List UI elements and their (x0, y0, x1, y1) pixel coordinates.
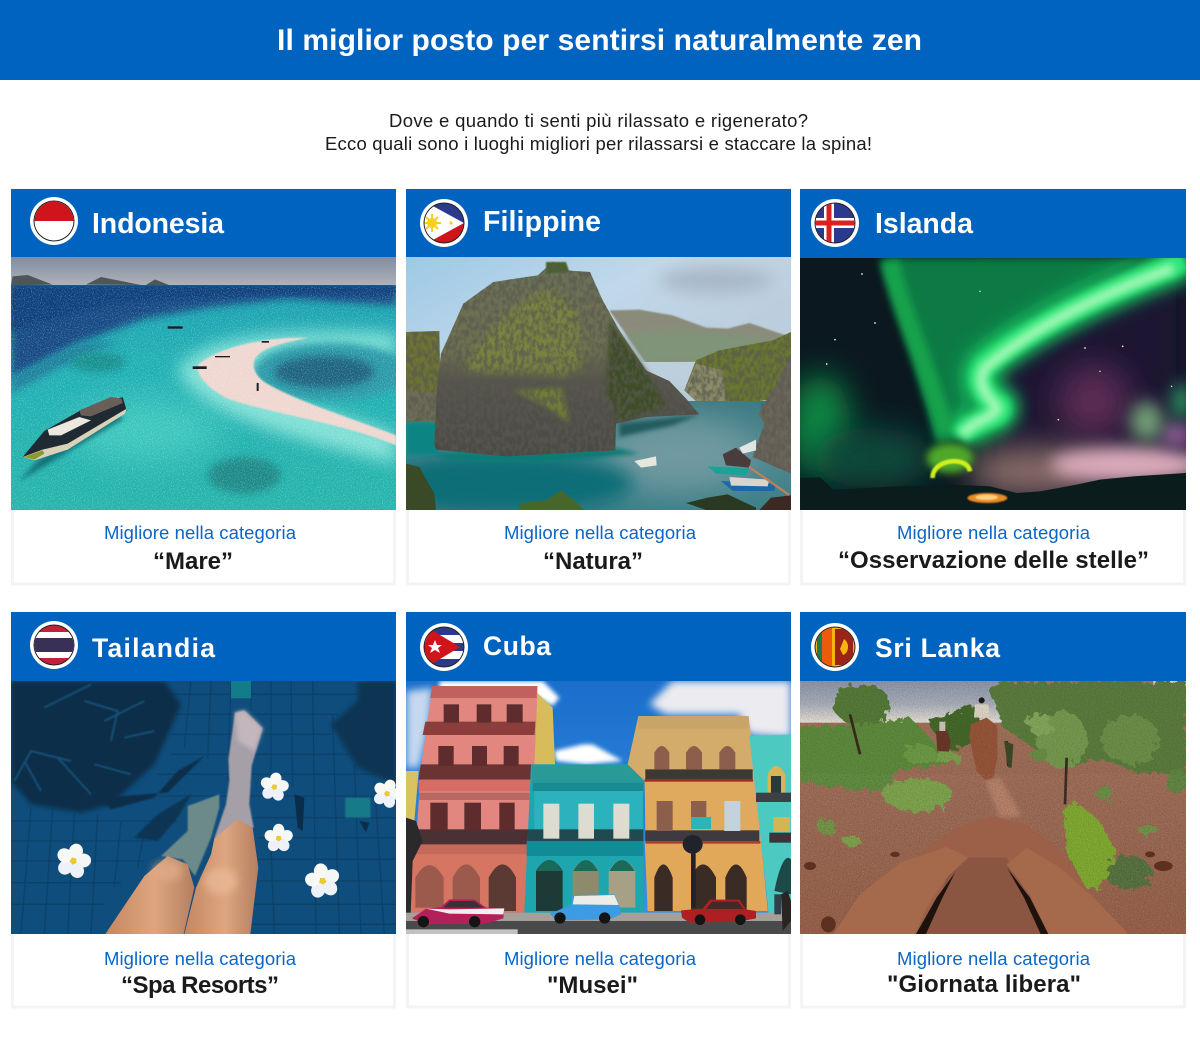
header bar: Filippine (406, 189, 791, 257)
caption: Tailandia: “Spa Resorts” (121, 972, 279, 999)
panel: Indonesia (11, 189, 408, 584)
yellow side (534, 691, 555, 764)
left rock (406, 331, 441, 422)
icon: Philippines flag (420, 199, 468, 247)
caption: Tailandia: Migliore nella categoria (104, 948, 297, 969)
heading: Indonesia: Indonesia (92, 208, 225, 240)
caption: Sri Lanka: "Giornata libera" (887, 971, 1081, 998)
caption: Cuba: "Musei" (547, 972, 638, 999)
heading: Sri Lanka: Sri Lanka (875, 633, 1000, 663)
header bar: Cuba (406, 612, 791, 681)
teal building (524, 764, 643, 913)
icon: Cuba flag (420, 623, 468, 671)
header bar: Islanda (800, 189, 1186, 258)
intro text (325, 110, 872, 154)
panel: Cuba (406, 612, 791, 1007)
caption: Filippine: Migliore nella categoria (504, 522, 697, 543)
caption: Cuba: Migliore nella categoria (504, 948, 697, 969)
caption: Indonesia: “Mare” (153, 548, 233, 575)
right rock (684, 332, 791, 401)
caption: Indonesia: Migliore nella categoria (104, 522, 297, 543)
panel: Islanda (790, 189, 1200, 584)
left foot submerged (161, 794, 219, 876)
pink building (409, 686, 538, 913)
orange building (628, 716, 768, 911)
caption: Cuba (504, 948, 697, 999)
elephant riders ahead (936, 697, 1013, 780)
header bar: Sri Lanka (800, 612, 1186, 681)
title: Il miglior posto per sentirsi naturalmente zen (277, 24, 922, 57)
header bar: Tailandia (11, 612, 396, 681)
right teal building (749, 734, 791, 914)
icon: Indonesia flag (30, 197, 78, 245)
street (406, 913, 791, 923)
right leg submerged (214, 710, 263, 838)
caption: Sri Lanka: Migliore nella categoria (897, 948, 1091, 969)
photo: northern lights (800, 258, 1186, 510)
elephant back foreground (833, 816, 1128, 934)
caption: Islanda (838, 522, 1149, 574)
heading: Tailandia: Tailandia (92, 633, 215, 663)
caption: Filippine: “Natura” (543, 548, 643, 575)
photo: colourful Havana buildings (406, 681, 791, 934)
caption: Filippine (504, 522, 697, 575)
icon: Thailand flag (30, 621, 78, 669)
intro text: Dove e quando ti senti più rilassato e rigenerato? (389, 110, 808, 131)
icon: Iceland flag (811, 199, 859, 247)
boats and jetty (634, 440, 789, 496)
heading: Islanda: Islanda (875, 208, 974, 240)
right thigh (184, 819, 258, 934)
photo: tropical sandbar with boat (11, 257, 396, 510)
panel: Filippine (366, 189, 791, 584)
caption: Islanda: Migliore nella categoria (897, 522, 1091, 543)
lamp post left (406, 818, 423, 914)
header bar: Indonesia (11, 189, 396, 257)
title banner (0, 0, 1200, 80)
caption: Sri Lanka (887, 948, 1091, 998)
photo: feet in spa pool with flowers (11, 681, 396, 934)
boat (19, 397, 127, 481)
left knee (105, 856, 194, 934)
flowers (50, 770, 407, 902)
classic cars (412, 894, 756, 927)
foreground foliage (406, 464, 791, 510)
photo: limestone karst lagoon (406, 257, 791, 510)
panel: Sri Lanka (793, 612, 1187, 1007)
icon: Sri Lanka flag (811, 623, 859, 671)
heading: Cuba: Cuba (483, 631, 551, 661)
photo: elephant ride through bush (800, 681, 1186, 934)
caption: Indonesia (104, 522, 297, 575)
intro text: Ecco quali sono i luoghi migliori per rilassarsi e staccare la spina! (325, 133, 872, 154)
caption: Islanda: “Osservazione delle stelle” (838, 547, 1149, 574)
panel: Tailandia (11, 612, 407, 1007)
caption: Tailandia (104, 948, 297, 999)
heading: Filippine: Filippine (483, 206, 601, 238)
main rock (434, 262, 699, 456)
